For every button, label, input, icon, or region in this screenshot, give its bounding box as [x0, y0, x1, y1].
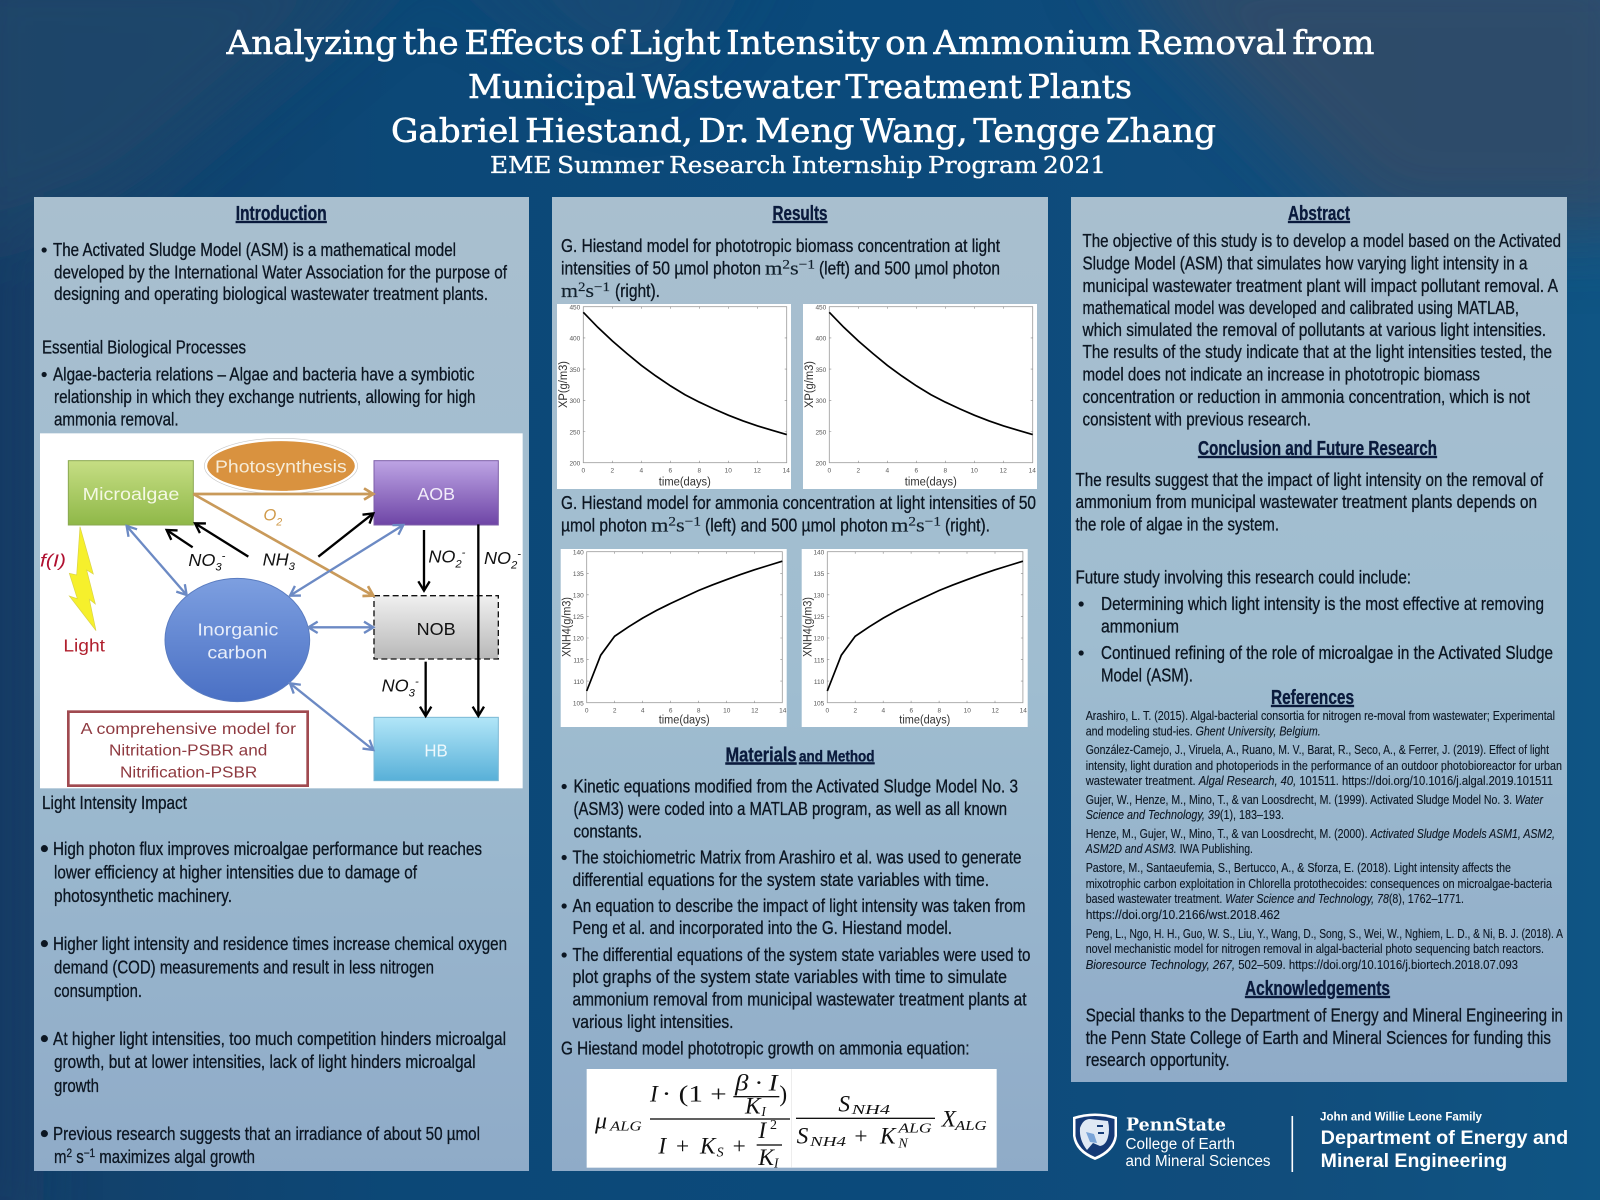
panel: results and methods [552, 197, 1048, 1171]
text block: light intensity impact: • [40, 1025, 49, 1053]
text block: biomass caption: −1 [594, 279, 610, 294]
text block: methods bullets [561, 776, 1030, 1058]
text: PennState College of Earth and Mineral Sciences [1126, 1115, 1271, 1170]
chart: XP at 500: 450 [815, 305, 827, 312]
circle: inorganic carbon [165, 578, 310, 702]
text block: activated sludge model: • [41, 240, 47, 260]
chart: XNH4 at 500: 10 [964, 708, 971, 715]
text block: light intensity impact: Light Intensity Impact [42, 793, 187, 813]
chart: XP at 50: 2 [610, 468, 614, 475]
chart: XP at 500: 350 [815, 367, 827, 374]
text block: activated sludge model: developed by the International Water Association for the purpose of [54, 262, 508, 282]
text block: light intensity impact: At higher light intensities, too much competition hinders microalgal [53, 1029, 506, 1049]
equation: phototropic growth: ALG [954, 1119, 987, 1134]
chart: XNH4 at 500: 135 [813, 571, 825, 578]
text block: conclusion: the role of algae in the system. [1076, 514, 1279, 534]
text block: methods bullets: The stoichiometric Matrix from Arashiro et al. was used to generate [572, 848, 1022, 868]
heading: references: References [1271, 687, 1354, 709]
panel: abstract and conclusions [1071, 197, 1567, 1082]
equation: phototropic growth: N [897, 1136, 908, 1151]
equation: phototropic growth: S [717, 1145, 724, 1160]
text block: abstract: Sludge Model (ASM) that simulates how varying light intensity in a [1082, 254, 1528, 274]
text block: future study: Model (ASM). [1101, 666, 1193, 686]
text block: ammonia caption: s [916, 516, 925, 536]
chart: XNH4 at 500: 0 [825, 708, 829, 715]
equation: phototropic growth: S [797, 1123, 809, 1149]
chart: XP at 500: time(days) [905, 477, 957, 489]
labels: species: - [462, 547, 466, 559]
labels: species: 3 [409, 687, 416, 699]
text: department name: Mineral Engineering [1321, 1151, 1507, 1172]
text: department name [1320, 1112, 1568, 1172]
callout: comprehensive model: A comprehensive model for [81, 721, 297, 738]
panel: introduction [34, 197, 529, 1171]
callout: comprehensive model [68, 712, 308, 786]
equation: phototropic growth: + [676, 1133, 689, 1159]
footer logos [1073, 1112, 1568, 1172]
text block: ammonia caption: −1 [685, 514, 701, 528]
labels: species: - [222, 550, 226, 562]
text block: biomass caption: 2 [578, 279, 586, 294]
text: PennState College of Earth and Mineral Sciences: and Mineral Sciences [1126, 1153, 1271, 1170]
text block: methods bullets: The differential equations of the system state variables were used to [572, 945, 1030, 965]
text block: future study: ammonium [1101, 616, 1179, 636]
text block: references: Pastore, M., Santaeufemia, S., Bertucco, A., & Sforza, E. (2018). Light intensity affects the [1086, 860, 1511, 875]
heading: abstract: Abstract [1288, 203, 1350, 225]
equation: phototropic growth: ) [779, 1082, 787, 1108]
title: Analyzing the Effects of Light Intensity on Ammonium Removal from [225, 23, 1375, 62]
text block: references: Science and Technology, 39(1), 183–193. [1086, 807, 1284, 822]
title [225, 23, 1375, 179]
equation: phototropic growth: K [744, 1093, 762, 1119]
text block: conclusion: ammonium from municipal wastewater treatment plants depends on [1076, 492, 1537, 512]
chart: XNH4 at 500: XNH4(g/m3) [803, 597, 815, 657]
chart: XP at 50 [557, 304, 791, 489]
chart: XNH4 at 50: time(days) [659, 715, 710, 727]
chart: XNH4 at 50: 0 [585, 708, 589, 715]
chart: XP at 500: 300 [815, 398, 827, 405]
text block: biomass caption: G. Hiestand model for phototropic biomass concentration at light [561, 236, 1000, 256]
text block: biomass caption: −1 [799, 256, 815, 272]
chart: XP at 50: time(days) [659, 477, 711, 489]
text block: light intensity impact: −1 [84, 1146, 95, 1160]
equation: phototropic growth: μ [594, 1108, 607, 1134]
equation: phototropic growth: ALG [609, 1119, 642, 1134]
chart: XNH4 at 500: 120 [813, 636, 825, 643]
label: f(I): f(I) [40, 551, 66, 571]
text block: light intensity impact: maximizes algal growth [95, 1147, 255, 1167]
chart: XP at 50: 14 [783, 468, 790, 475]
chart: XNH4 at 500: 4 [881, 708, 885, 715]
title: Gabriel Hiestand, Dr. Meng Wang, Tengge Zhang [391, 111, 1216, 150]
chart: XP at 50: 12 [754, 468, 761, 475]
ellipse: photosynthesis [204, 438, 358, 494]
text block: references: Bioresource Technology, 267, 502–509. https://doi.org/10.1016/j.biortech.2018.07.093 [1086, 957, 1518, 972]
text block: light intensity impact: Previous research suggests that an irradiance of about 50 µmol [53, 1124, 480, 1144]
equation: phototropic growth: ALG [897, 1121, 932, 1136]
labels: species: NO [382, 676, 409, 696]
chart: XNH4 at 500: time(days) [899, 715, 950, 727]
chart: XP at 50: 200 [569, 461, 581, 468]
text block: light intensity impact: Higher light intensity and residence times increase chemical oxygen [53, 934, 507, 954]
chart: XNH4 at 50: 130 [573, 593, 584, 600]
text: department name: John and Willie Leone Family [1320, 1112, 1483, 1124]
chart: XP at 500: 200 [815, 461, 827, 468]
chart: XNH4 at 50: 140 [573, 550, 584, 557]
chart: XP at 50: 10 [725, 468, 732, 475]
chart: XP at 500: 14 [1029, 468, 1036, 475]
text block: references: based wastewater treatment. Water Science and Technology, 78(8), 1762–1771. [1086, 891, 1464, 906]
text block: methods bullets: (ASM3) were coded into a MATLAB program, as well as all known [574, 799, 1007, 819]
equation: phototropic growth: NH4 [809, 1135, 846, 1150]
chart: XP at 50: 350 [569, 367, 581, 374]
box: microalgae [68, 461, 193, 525]
chart: XNH4 at 500: 105 [813, 701, 825, 708]
label: light: Light [63, 636, 105, 656]
arrows: oxygen [193, 494, 373, 596]
heading: materials and method: and Method [799, 748, 874, 766]
chart: XNH4 at 50: 2 [613, 708, 617, 715]
heading: conclusion and future research: Conclusion and Future Research [1198, 438, 1437, 460]
text block: future study: • [1078, 643, 1084, 663]
equation: phototropic growth: I [760, 1104, 766, 1119]
text block: biomass caption: (right). [615, 281, 660, 301]
text block: biomass caption [561, 236, 1000, 302]
labels: species: 2 [454, 558, 462, 570]
text block: acknowledgements [1086, 1006, 1563, 1070]
chart: XP at 500: 0 [827, 468, 831, 475]
text block: light intensity impact: High photon flux improves microalgae performance but reaches [53, 839, 482, 859]
equation: phototropic growth: β · I [734, 1071, 779, 1097]
labels: species: 2 [510, 560, 518, 572]
labels: species: NO [484, 548, 511, 568]
text block: abstract [1082, 231, 1561, 430]
chart: XNH4 at 50: 110 [573, 679, 584, 686]
chart: XP at 500: 250 [815, 430, 827, 437]
callout: comprehensive model: Nitrification-PSBR [120, 764, 257, 781]
text block: references: https://doi.org/10.2166/wst.2018.462 [1086, 907, 1280, 922]
text block: light intensity impact: consumption. [54, 981, 142, 1001]
diagram: algae-bacteria relations [40, 433, 523, 788]
box: AOB: AOB [417, 484, 455, 504]
equation: phototropic growth: · (1 + [662, 1082, 727, 1108]
text block: methods bullets: G Hiestand model phototropic growth on ammonia equation: [561, 1038, 970, 1058]
chart: XNH4 at 50 [561, 549, 787, 727]
labels: species [188, 506, 521, 699]
text block: light intensity impact: lower efficiency at higher intensities due to damage of [54, 862, 418, 882]
heading: introduction: Introduction [236, 203, 327, 225]
box: NOB: NOB [417, 619, 456, 639]
text block: light intensity impact [40, 793, 507, 1167]
text block: biomass caption: s [586, 281, 594, 302]
equation: phototropic growth: K [879, 1123, 897, 1149]
box: HB: HB [424, 741, 448, 761]
text block: biomass caption: m [765, 258, 780, 280]
chart: XNH4 at 500: 12 [992, 708, 999, 715]
text block: biomass caption: m [561, 281, 576, 302]
text block: ammonia caption: m [651, 516, 666, 536]
chart: XNH4 at 50: 14 [779, 708, 787, 715]
chart: XP at 50: 0 [581, 468, 585, 475]
text block: light intensity impact: photosynthetic machinery. [54, 886, 232, 906]
chart: XP at 500: 2 [856, 468, 860, 475]
text block: methods bullets: various light intensities. [572, 1012, 734, 1032]
text block: references: ASM2D and ASM3. IWA Publishing. [1085, 841, 1253, 856]
text block: light intensity impact: • [40, 835, 49, 863]
heading: materials and method [726, 744, 874, 766]
labels: species: O [263, 506, 276, 525]
text block: essential biological processes: Algae-bacteria relations – Algae and bacteria have a symbiotic [53, 364, 474, 384]
text block: methods bullets: • [561, 776, 567, 796]
text block: methods bullets: plot graphs of the system state variables with time to simulate [572, 967, 1007, 987]
equation: phototropic growth: X [941, 1107, 957, 1133]
chart: XP at 500: 8 [943, 468, 947, 475]
labels: species: 2 [275, 516, 282, 528]
text block: methods bullets: Peng et al. and incorporated into the G. Hiestand model. [572, 918, 952, 938]
chart: XNH4 at 50: 120 [573, 636, 584, 643]
text block: future study [1076, 568, 1553, 686]
chart: XNH4 at 500: 115 [814, 658, 825, 665]
text block: light intensity impact: demand (COD) measurements and result in less nitrogen [54, 958, 434, 978]
text block: essential biological processes: relationship in which they exchange nutrients, allowing for high [54, 387, 476, 407]
text block: biomass caption: intensities of 50 µmol photon [561, 258, 761, 278]
labels: species: 3 [215, 562, 222, 574]
text block: activated sludge model [41, 240, 508, 304]
equation: phototropic growth: K [699, 1133, 717, 1159]
text block: future study: Future study involving this research could include: [1076, 568, 1411, 588]
chart: XNH4 at 50: 4 [641, 708, 645, 715]
text block: future study: • [1078, 594, 1084, 614]
box: microalgae: Microalgae [83, 484, 179, 504]
text block: ammonia caption: 2 [908, 514, 916, 528]
text block: biomass caption: s [790, 258, 799, 280]
text block: ammonia caption: −1 [925, 514, 941, 528]
chart: XNH4 at 50: 10 [723, 708, 731, 715]
text block: ammonia caption: (right). [945, 516, 990, 536]
chart: XNH4 at 500: 125 [813, 614, 825, 621]
chart: XP at 500 [803, 304, 1037, 489]
text block: methods bullets: An equation to describe the impact of light intensity was taken from [572, 896, 1026, 916]
callout: comprehensive model: Nitritation-PSBR and [109, 743, 267, 760]
chart: XNH4 at 50: 115 [573, 658, 584, 665]
text block: references: Gujer, W., Henze, M., Mino, T., & van Loosdrecht, M. (1999). Activated Sludge Model No. 3. Water [1086, 792, 1544, 807]
text block: methods bullets: • [561, 896, 567, 916]
chart: XP at 50: 250 [569, 430, 581, 437]
text block: light intensity impact: growth [54, 1076, 99, 1096]
text block: references [1085, 708, 1563, 972]
chart: XP at 500: 12 [1000, 468, 1007, 475]
text block: methods bullets: differential equations for the system state variables with time. [572, 870, 989, 890]
equation: phototropic growth: NH4 [850, 1103, 890, 1118]
equation: phototropic growth: I [649, 1082, 659, 1108]
chart: XNH4 at 50: 8 [697, 708, 701, 715]
text block: light intensity impact: growth, but at lower intensities, lack of light hinders microalgal [54, 1052, 476, 1072]
chart: XP at 500: 6 [914, 468, 918, 475]
text block: essential biological processes [41, 338, 476, 430]
text block: light intensity impact: s [72, 1147, 84, 1167]
text: PennState College of Earth and Mineral Sciences: PennState [1126, 1115, 1226, 1136]
chart: XNH4 at 500: 14 [1020, 708, 1027, 715]
text: department name: Department of Energy and [1321, 1128, 1568, 1149]
chart: XNH4 at 50: 12 [751, 708, 759, 715]
text block: abstract: concentration or reduction in ammonia concentration, which is not [1082, 387, 1530, 407]
chart: XP at 500: 400 [815, 336, 827, 343]
icon: Penn State shield [1073, 1114, 1117, 1160]
equation: phototropic growth: I [657, 1133, 667, 1159]
circle: inorganic carbon: Inorganic [197, 620, 278, 640]
text block: abstract: model does not indicate an increase in phototropic biomass [1082, 364, 1480, 384]
text block: ammonia caption: s [676, 516, 685, 536]
chart: XNH4 at 50: 6 [669, 708, 673, 715]
text block: ammonia caption: G. Hiestand model for ammonia concentration at light intensities of 50 [561, 493, 1036, 513]
chart: XNH4 at 50: 125 [573, 614, 584, 621]
chart: XNH4 at 500: 130 [813, 593, 825, 600]
equation: phototropic growth [587, 1069, 997, 1171]
equation: phototropic growth: + [733, 1133, 746, 1159]
text block: abstract: mathematical model was developed and calibrated using MATLAB, [1082, 298, 1519, 318]
text block: biomass caption: 2 [782, 256, 790, 272]
text block: essential biological processes: ammonia removal. [54, 410, 179, 430]
text block: references: and modeling stud-ies. Ghent University, Belgium. [1086, 724, 1321, 738]
text block: activated sludge model: designing and operating biological wastewater treatment plants. [54, 284, 488, 304]
equation: phototropic growth: K [757, 1145, 775, 1171]
equation: phototropic growth: S [838, 1092, 850, 1118]
chart: XP at 500: XP(g/m3) [804, 361, 816, 408]
text block: methods bullets: • [561, 945, 567, 965]
box: AOB [374, 461, 498, 525]
text block: conclusion [1076, 470, 1544, 534]
text block: methods bullets: • [561, 848, 567, 868]
text block: references: Henze, M., Gujer, W., Mino, T., & van Loosdrecht, M. (2000). Activated Sludge Models ASM1, ASM2, [1086, 826, 1555, 841]
text block: light intensity impact: • [40, 1120, 49, 1148]
chart: XNH4 at 500: 8 [937, 708, 941, 715]
text block: abstract: consistent with previous research. [1082, 410, 1311, 430]
chart: XNH4 at 50: 135 [573, 571, 584, 578]
text block: ammonia caption: µmol photon [561, 516, 647, 536]
text block: essential biological processes: • [41, 364, 47, 384]
heading: materials and method: Materials [726, 744, 796, 766]
text block: references: wastewater treatment. Algal Research, 40, 101511. https://doi.org/10.1016/j.algal.2019.101511 [1085, 773, 1553, 788]
chart: XP at 50: 300 [569, 398, 581, 405]
text block: biomass caption: (left) and 500 µmol photon [819, 258, 1000, 278]
text block: acknowledgements: research opportunity. [1086, 1050, 1230, 1070]
labels: species: NO [428, 547, 455, 567]
chart: XP at 50: XP(g/m3) [558, 361, 570, 408]
chart: XNH4 at 500: 140 [813, 550, 825, 557]
arrows: nitrogen flows [167, 513, 478, 716]
equation: phototropic growth: I [773, 1155, 779, 1170]
text block: ammonia caption: m [891, 516, 906, 536]
chart: XP at 50: 450 [569, 305, 581, 312]
equation: phototropic growth: 2 [770, 1118, 777, 1133]
chart: XNH4 at 50: 105 [573, 701, 584, 708]
box: NOB [374, 596, 498, 659]
labels: species: - [415, 676, 419, 688]
equation: phototropic growth: + [854, 1123, 867, 1149]
chart: XNH4 at 500: 110 [814, 679, 825, 686]
text block: methods bullets: ammonium removal from municipal wastewater treatment plants at [572, 990, 1026, 1010]
chart: XP at 50: 400 [569, 336, 581, 343]
labels: species: NO [188, 550, 215, 570]
equation: phototropic growth: I [757, 1118, 767, 1144]
circle: inorganic carbon: carbon [207, 642, 267, 662]
heading: results: Results [772, 203, 828, 225]
text block: methods bullets: Kinetic equations modified from the Activated Sludge Model No. 3 [574, 776, 1018, 796]
labels: species: NH [263, 549, 289, 569]
chart: XP at 500: 10 [971, 468, 978, 475]
ellipse: photosynthesis: Photosynthesis [215, 457, 347, 477]
text block: ammonia caption: (left) and 500 µmol photon [705, 516, 888, 536]
chart: XP at 500: 4 [885, 468, 889, 475]
chart: XNH4 at 500: 6 [909, 708, 913, 715]
text block: light intensity impact: 2 [66, 1146, 72, 1160]
labels: species: - [517, 548, 521, 560]
text: PennState College of Earth and Mineral Sciences: College of Earth [1126, 1136, 1235, 1153]
text block: light intensity impact: • [40, 930, 49, 958]
text block: essential biological processes: Essential Biological Processes [42, 338, 246, 358]
chart: XNH4 at 500 [802, 549, 1028, 727]
chart: XNH4 at 50: XNH4(g/m3) [562, 597, 574, 657]
icon: lightning [69, 527, 96, 631]
chart: XP at 50: 8 [697, 468, 701, 475]
text block: ammonia caption: 2 [668, 514, 676, 528]
chart: XP at 50: 4 [639, 468, 643, 475]
text block: ammonia caption [561, 493, 1036, 536]
heading: acknowledgements: Acknowledgements [1245, 978, 1390, 1000]
labels: species: 3 [289, 561, 296, 573]
text block: methods bullets: constants. [574, 822, 642, 842]
title: EME Summer Research Internship Program 2021 [490, 153, 1106, 179]
chart: XP at 50: 6 [668, 468, 672, 475]
title: Municipal Wastewater Treatment Plants [468, 67, 1132, 106]
chart: XNH4 at 500: 2 [853, 708, 857, 715]
arrows: carbon exchange [127, 525, 403, 750]
text block: activated sludge model: The Activated Sludge Model (ASM) is a mathematical model [53, 240, 456, 260]
text block: light intensity impact: m [54, 1147, 69, 1167]
box: HB [374, 717, 498, 781]
